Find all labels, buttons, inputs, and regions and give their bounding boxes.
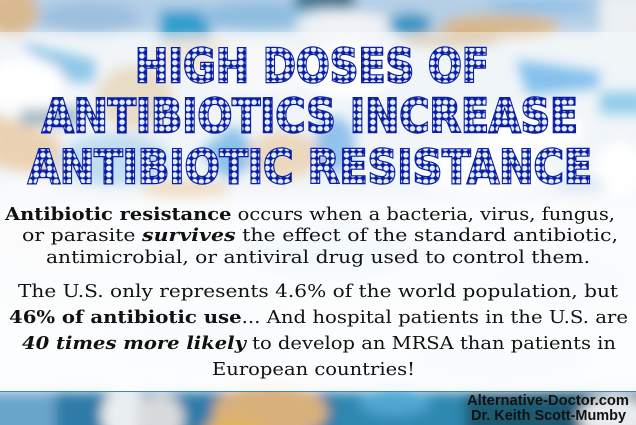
title: ANTIBIOTICS INCREASE: [42, 89, 578, 143]
definition paragraph: or parasite survives the effect of the standard antibiotic,: [22, 225, 618, 246]
attribution: Alternative-Doctor.com: [467, 392, 629, 409]
title: HIGH DOSES OF: [135, 39, 489, 93]
title: [28, 39, 592, 194]
attribution: [467, 392, 629, 424]
statistics paragraph: 40 times more likely to develop an MRSA than patients in: [22, 333, 616, 354]
definition paragraph: antimicrobial, or antiviral drug used to control them.: [46, 247, 590, 268]
definition paragraph: [4, 204, 618, 268]
definition paragraph: Antibiotic resistance occurs when a bacteria, virus, fungus,: [4, 204, 615, 225]
statistics paragraph: 46% of antibiotic use ... And hospital patients in the U.S. are: [9, 307, 628, 328]
statistics paragraph: European countries!: [212, 359, 415, 380]
statistics paragraph: [9, 281, 628, 380]
attribution: Dr. Keith Scott-Mumby: [471, 407, 627, 424]
statistics paragraph: The U.S. only represents 4.6% of the world population, but: [18, 281, 619, 302]
bottom band edge: [0, 391, 636, 392]
